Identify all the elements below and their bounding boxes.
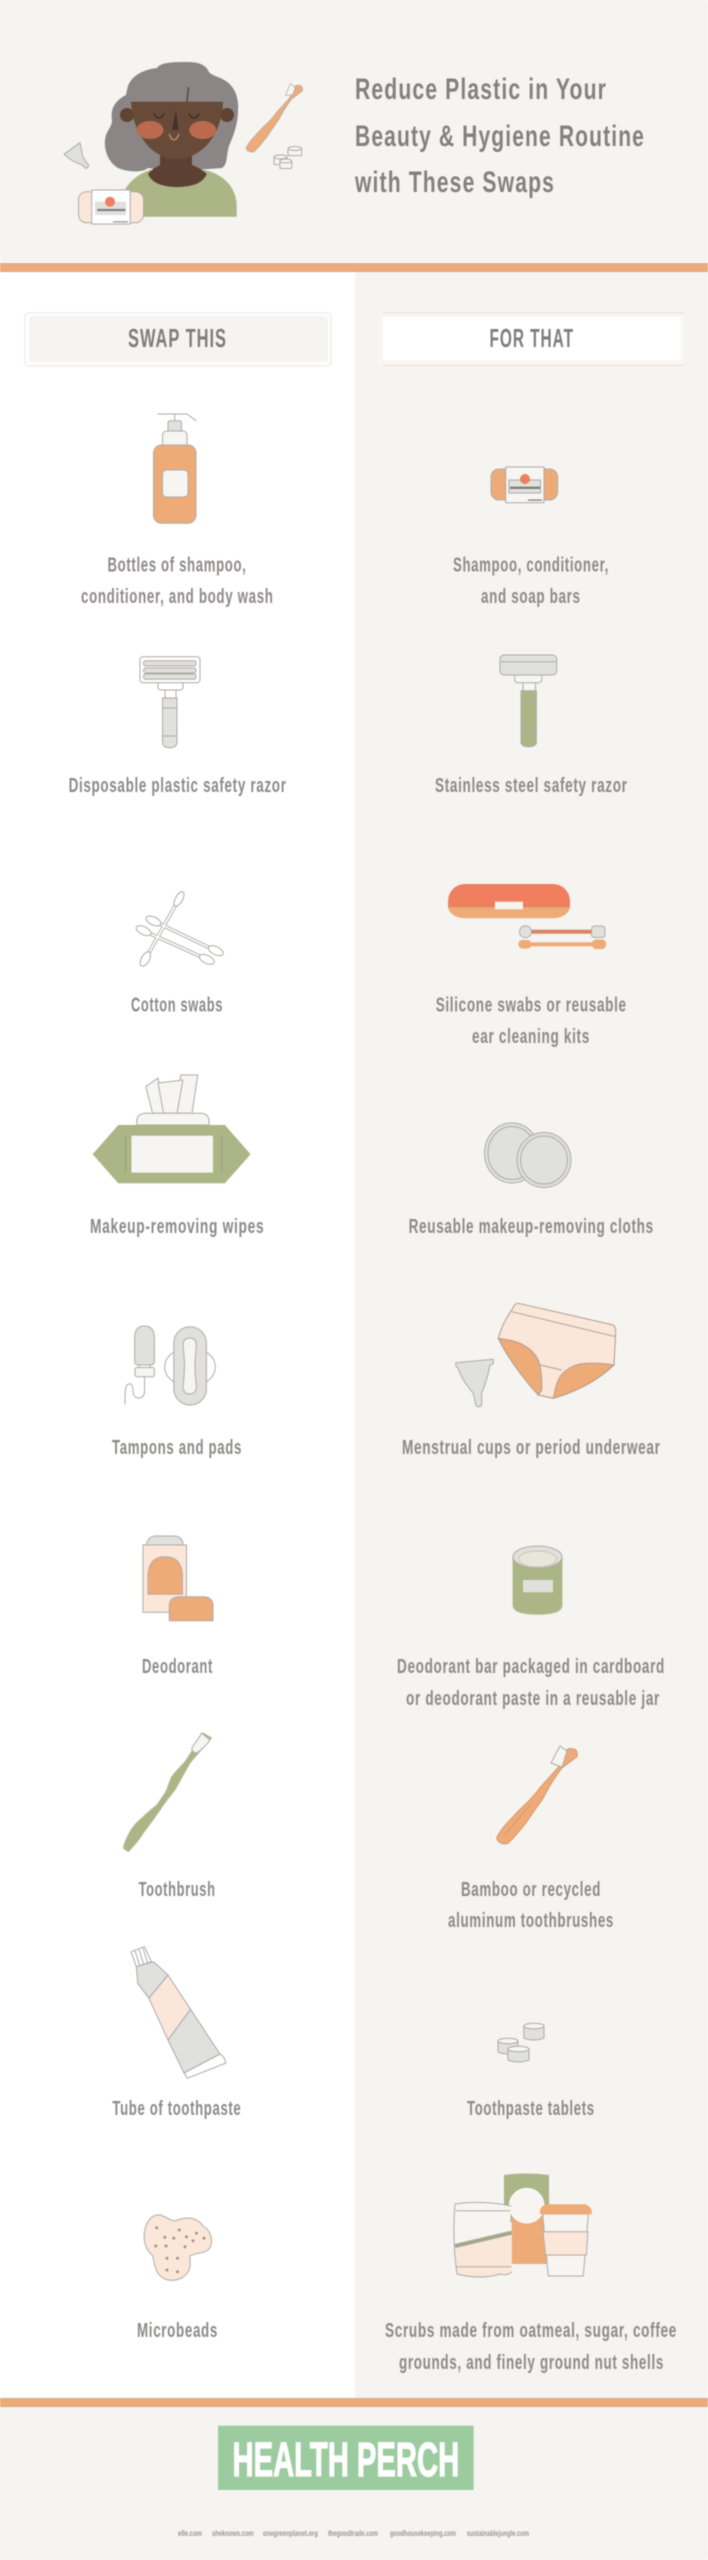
panel: for that column xyxy=(355,272,708,2398)
icon: ear cleaning case xyxy=(448,884,570,918)
heading: swap this xyxy=(25,313,331,366)
item: bamboo toothbrush xyxy=(448,1746,614,1932)
item: bottles xyxy=(81,414,274,608)
label: Bottles of shampoo, xyxy=(108,555,246,577)
icon: safety razor xyxy=(500,655,557,747)
item: cotton swabs xyxy=(131,890,225,1017)
label: conditioner, and body wash xyxy=(81,586,274,608)
source list: goodhousekeeping.com xyxy=(390,2529,456,2538)
label: and soap bars xyxy=(481,586,581,608)
title xyxy=(354,73,645,199)
source list xyxy=(178,2529,529,2538)
label: Toothpaste tablets xyxy=(467,2098,595,2120)
nose and mouth detail xyxy=(169,134,179,140)
label: Tube of toothpaste xyxy=(112,2098,241,2120)
label xyxy=(397,1656,665,1710)
icon: pad xyxy=(165,1327,215,1405)
icon: scrub ingredients xyxy=(454,2174,592,2277)
icon: silicone swabs xyxy=(518,926,606,949)
cheeks xyxy=(136,121,216,139)
heading: swap this: SWAP THIS xyxy=(128,323,227,353)
icon: disposable razor xyxy=(140,657,200,748)
panel: swap this column xyxy=(0,272,355,2398)
title: with These Swaps xyxy=(354,166,555,199)
label xyxy=(453,555,609,608)
item: wipes xyxy=(90,1075,264,1238)
logo: health perch: HEALTH PERCH xyxy=(232,2434,459,2487)
source list: sustainablejungle.com xyxy=(467,2529,529,2538)
source list: thegoodtrade.com xyxy=(328,2529,378,2538)
ears xyxy=(120,108,234,122)
icon: green toothbrush xyxy=(123,1733,212,1852)
icon: tablets xyxy=(498,2023,544,2062)
label: Disposable plastic safety razor xyxy=(69,775,287,797)
label: Makeup-removing wipes xyxy=(90,1216,264,1238)
eyes xyxy=(154,114,199,118)
icon: menstrual cup xyxy=(456,1359,494,1407)
heading: for that xyxy=(378,313,684,366)
label: aluminum toothbrushes xyxy=(448,1910,614,1932)
icon: cotton swabs xyxy=(135,890,225,968)
icon: period underwear xyxy=(498,1303,616,1398)
label: Tampons and pads xyxy=(112,1437,242,1459)
illustration: woman with plastic-free products xyxy=(64,62,302,224)
label xyxy=(436,995,627,1048)
item: toothpaste tablets xyxy=(467,2023,595,2120)
panel: header xyxy=(0,0,708,263)
item: microbeads xyxy=(137,2215,218,2342)
shirt xyxy=(122,170,237,217)
icon: tampon xyxy=(125,1326,154,1404)
item: reusable cloths xyxy=(409,1123,654,1238)
source list: onegreenplanet.org xyxy=(263,2529,318,2538)
item: deodorant alternatives xyxy=(397,1546,665,1710)
icon: deodorant jar xyxy=(513,1546,562,1614)
item: toothbrush xyxy=(123,1733,216,1901)
icon: deodorant stick xyxy=(143,1536,213,1621)
label: Toothbrush xyxy=(139,1879,216,1901)
label: Microbeads xyxy=(137,2320,218,2342)
icon: toothpaste tube xyxy=(131,1947,226,2078)
logo: health perch xyxy=(218,2426,474,2490)
label xyxy=(448,1879,614,1932)
item: deodorant xyxy=(142,1536,213,1678)
source list: elle.com xyxy=(178,2529,202,2538)
item: silicone swabs xyxy=(436,884,627,1048)
label: Cotton swabs xyxy=(131,995,223,1017)
title: Reduce Plastic in Your xyxy=(355,73,607,106)
menstrual cup xyxy=(64,143,89,168)
soap bar xyxy=(78,190,144,224)
hair xyxy=(105,62,238,171)
item: natural scrubs xyxy=(385,2174,677,2374)
icon: makeup rounds xyxy=(484,1123,571,1188)
item: tampons and pads xyxy=(112,1326,242,1459)
item: toothpaste tube xyxy=(112,1947,241,2120)
label: ear cleaning kits xyxy=(472,1026,590,1048)
icon: microbead blob xyxy=(144,2215,211,2280)
toothpaste tablets xyxy=(274,146,302,168)
hair parting xyxy=(187,87,188,102)
face xyxy=(131,102,223,159)
icon: pump bottle xyxy=(154,414,196,523)
source list: sheknows.com xyxy=(212,2529,254,2538)
heading: for that: FOR THAT xyxy=(490,323,574,353)
bamboo toothbrush xyxy=(246,84,302,152)
label: Deodorant xyxy=(142,1656,213,1678)
nose xyxy=(172,110,178,130)
item: steel razor xyxy=(435,655,628,797)
item: bars xyxy=(453,467,609,608)
label: Bamboo or recycled xyxy=(461,1879,601,1901)
label xyxy=(81,555,274,608)
item: plastic razor xyxy=(69,657,287,797)
neck xyxy=(148,150,207,187)
item: cups and underwear xyxy=(402,1303,661,1459)
icon: bamboo toothbrush xyxy=(497,1746,577,1844)
label xyxy=(385,2320,677,2374)
panel: footer xyxy=(0,2407,708,2560)
icon: wipes package xyxy=(93,1075,251,1183)
label: Shampoo, conditioner, xyxy=(453,555,609,577)
icon: soap bar xyxy=(491,467,558,503)
